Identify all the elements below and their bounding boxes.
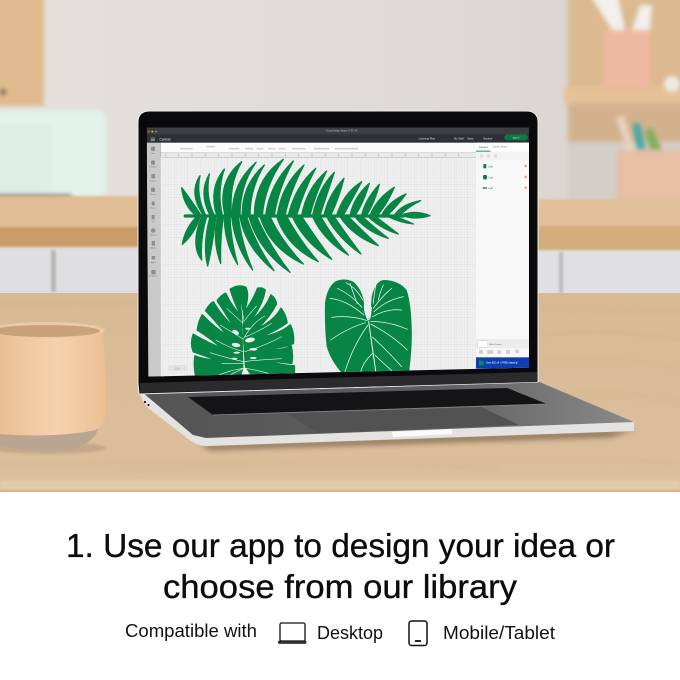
left sidebar: Upload bbox=[150, 262, 156, 264]
title bar: Cricut Design Space v7.XX.XX bbox=[326, 130, 358, 133]
palm leaf bbox=[182, 159, 430, 272]
layers panel: Blank Canvas bbox=[489, 344, 502, 346]
wall bbox=[0, 0, 680, 200]
layers panel: Layers bbox=[479, 145, 488, 149]
canvas grid bbox=[161, 157, 477, 381]
icon: phone bbox=[409, 621, 427, 646]
app header: My Stuff bbox=[454, 136, 464, 140]
left sidebar: Images bbox=[150, 208, 156, 210]
app header: Learning Plan bbox=[419, 136, 436, 140]
app header: Canvas bbox=[159, 138, 171, 142]
pink pen cup bbox=[590, 0, 680, 92]
right counter bbox=[535, 199, 680, 293]
layers panel: Color Sync bbox=[492, 145, 507, 149]
left sidebar: Editable bbox=[150, 247, 156, 250]
anthurium leaf bbox=[325, 279, 412, 378]
compatible with label: Compatible with bbox=[125, 621, 257, 641]
left sidebar: Projects bbox=[150, 179, 156, 182]
front notch bbox=[392, 429, 452, 437]
left sidebar bbox=[147, 143, 164, 379]
heading bbox=[66, 527, 615, 605]
heading: choose from our library bbox=[163, 568, 518, 605]
icon: laptop bbox=[278, 623, 306, 643]
white caption panel bbox=[0, 492, 680, 680]
laptop base bbox=[138, 381, 634, 446]
deck bbox=[142, 381, 634, 438]
layers panel: Leaf bbox=[488, 177, 493, 179]
left sidebar: Text bbox=[151, 220, 155, 223]
heading: 1. Use our app to design your idea or bbox=[66, 527, 615, 564]
wooden table bbox=[0, 293, 680, 492]
coffee mug bbox=[0, 322, 106, 454]
app header: Explore bbox=[483, 136, 493, 140]
app screen, drawn in 3x coordinates bbox=[147, 127, 529, 381]
title bar bbox=[147, 127, 529, 135]
layers panel bbox=[476, 143, 529, 369]
photo background: blurred kitchen bbox=[0, 0, 680, 492]
left sidebar: Phrases bbox=[150, 235, 156, 237]
mobile tablet label: Mobile/Tablet bbox=[443, 623, 555, 643]
promo banner: Save $10 off + FREE shipping! bbox=[486, 363, 518, 365]
zoom control: 25% bbox=[175, 366, 181, 370]
left sidebar: Shapes bbox=[150, 194, 156, 196]
app header bbox=[147, 134, 529, 143]
left sidebar: Templates bbox=[149, 166, 157, 169]
laptop lid bbox=[138, 111, 538, 394]
app header: Make It bbox=[513, 136, 520, 139]
left sidebar: New bbox=[151, 153, 155, 155]
toolbar and ruler bbox=[161, 143, 476, 157]
right shelf unit bbox=[564, 0, 680, 200]
desktop label: Desktop bbox=[317, 623, 383, 643]
left counter bbox=[0, 196, 145, 294]
left wooden cabinet bbox=[0, 0, 44, 106]
zoom control bbox=[167, 365, 187, 371]
trackpad bbox=[288, 407, 519, 433]
layers panel: Leaf bbox=[488, 166, 493, 168]
silver side and front edge bbox=[138, 388, 634, 446]
layers panel: Leaf bbox=[488, 188, 493, 190]
monstera leaf bbox=[192, 286, 294, 380]
keyboard bbox=[188, 388, 547, 415]
left sidebar: Monogram bbox=[149, 276, 158, 278]
ports bbox=[144, 401, 150, 406]
basket and pencils bbox=[616, 115, 680, 204]
app header: Save bbox=[467, 136, 474, 140]
laptop bbox=[138, 111, 634, 450]
promo banner bbox=[476, 357, 529, 369]
cutting machine blurred bbox=[0, 110, 106, 200]
shadow under laptop bbox=[200, 430, 634, 450]
